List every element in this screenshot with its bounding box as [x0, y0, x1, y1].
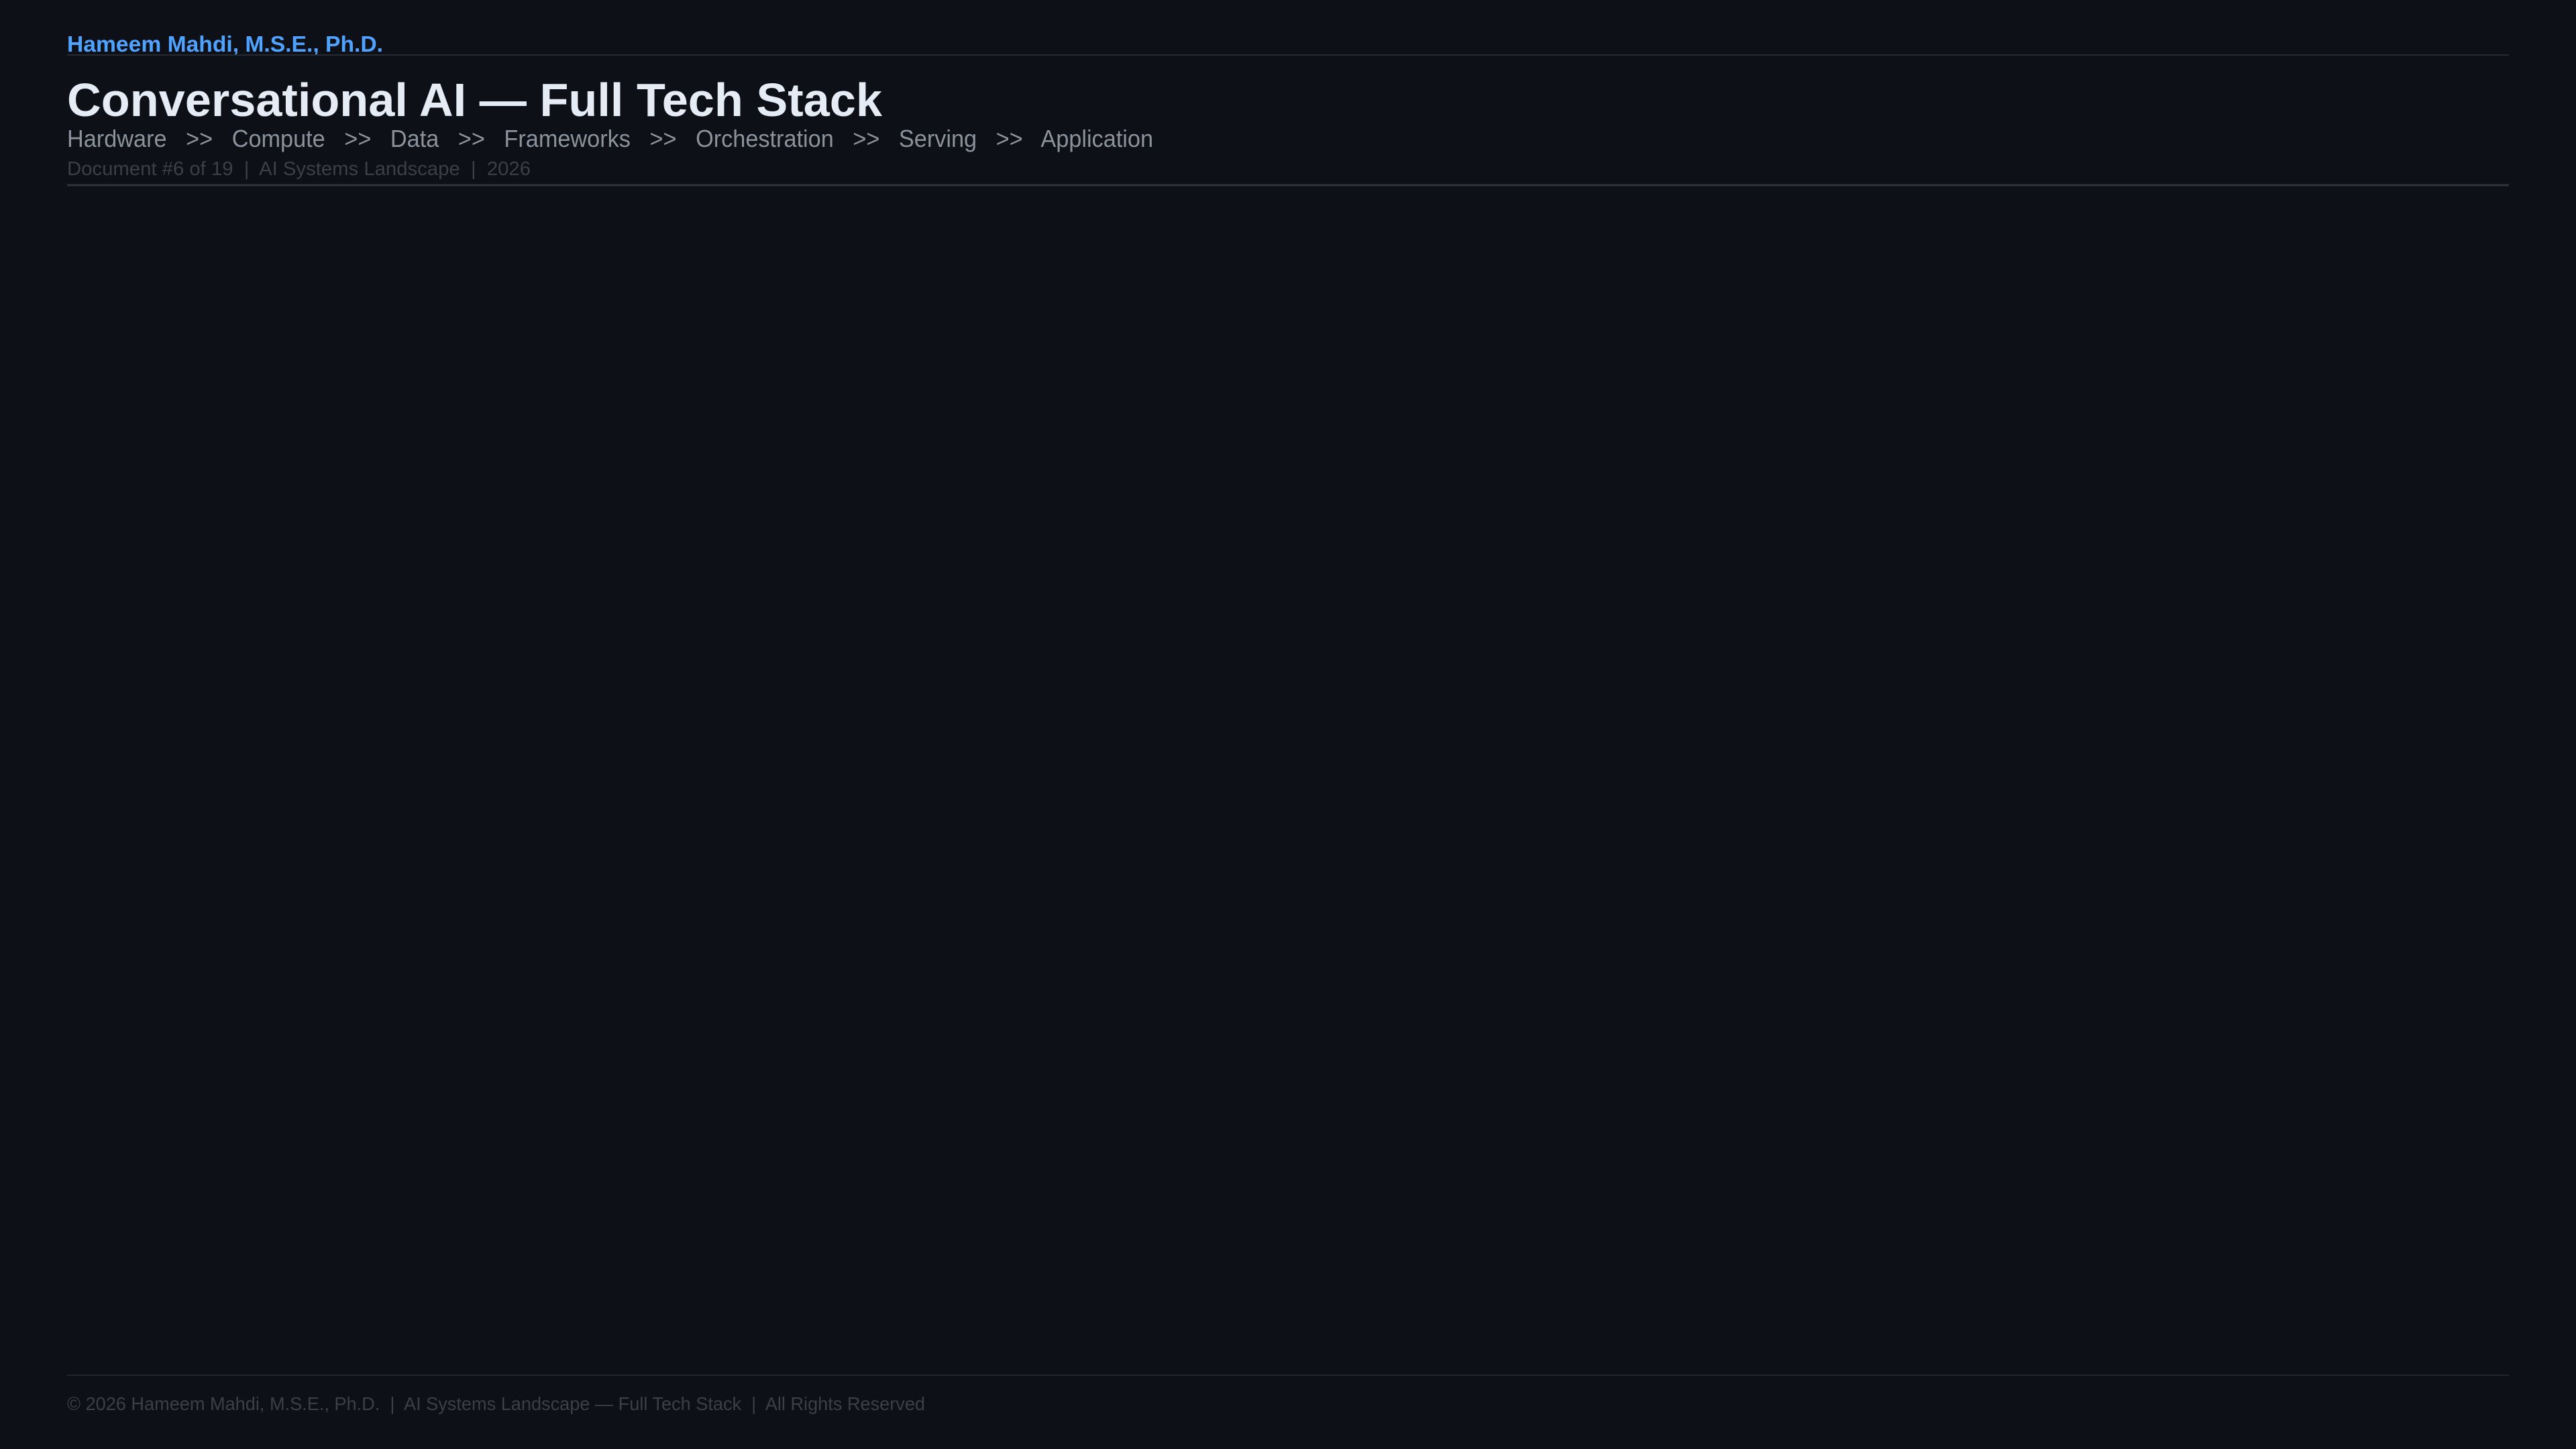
document info: Document #6 of 19 | AI Systems Landscape | 2026	[67, 158, 531, 180]
author name: Hameem Mahdi, M.S.E., Ph.D.	[67, 32, 383, 56]
subtitle: stack layers: Hardware >> Compute >> Data >> Frameworks >> Orchestration >> Serving >> Application	[67, 125, 1153, 152]
title: Conversational AI — Full Tech Stack	[67, 74, 882, 126]
footer: © 2026 Hameem Mahdi, M.S.E., Ph.D. | AI Systems Landscape — Full Tech Stack | All Rights Reserved	[67, 1393, 925, 1414]
